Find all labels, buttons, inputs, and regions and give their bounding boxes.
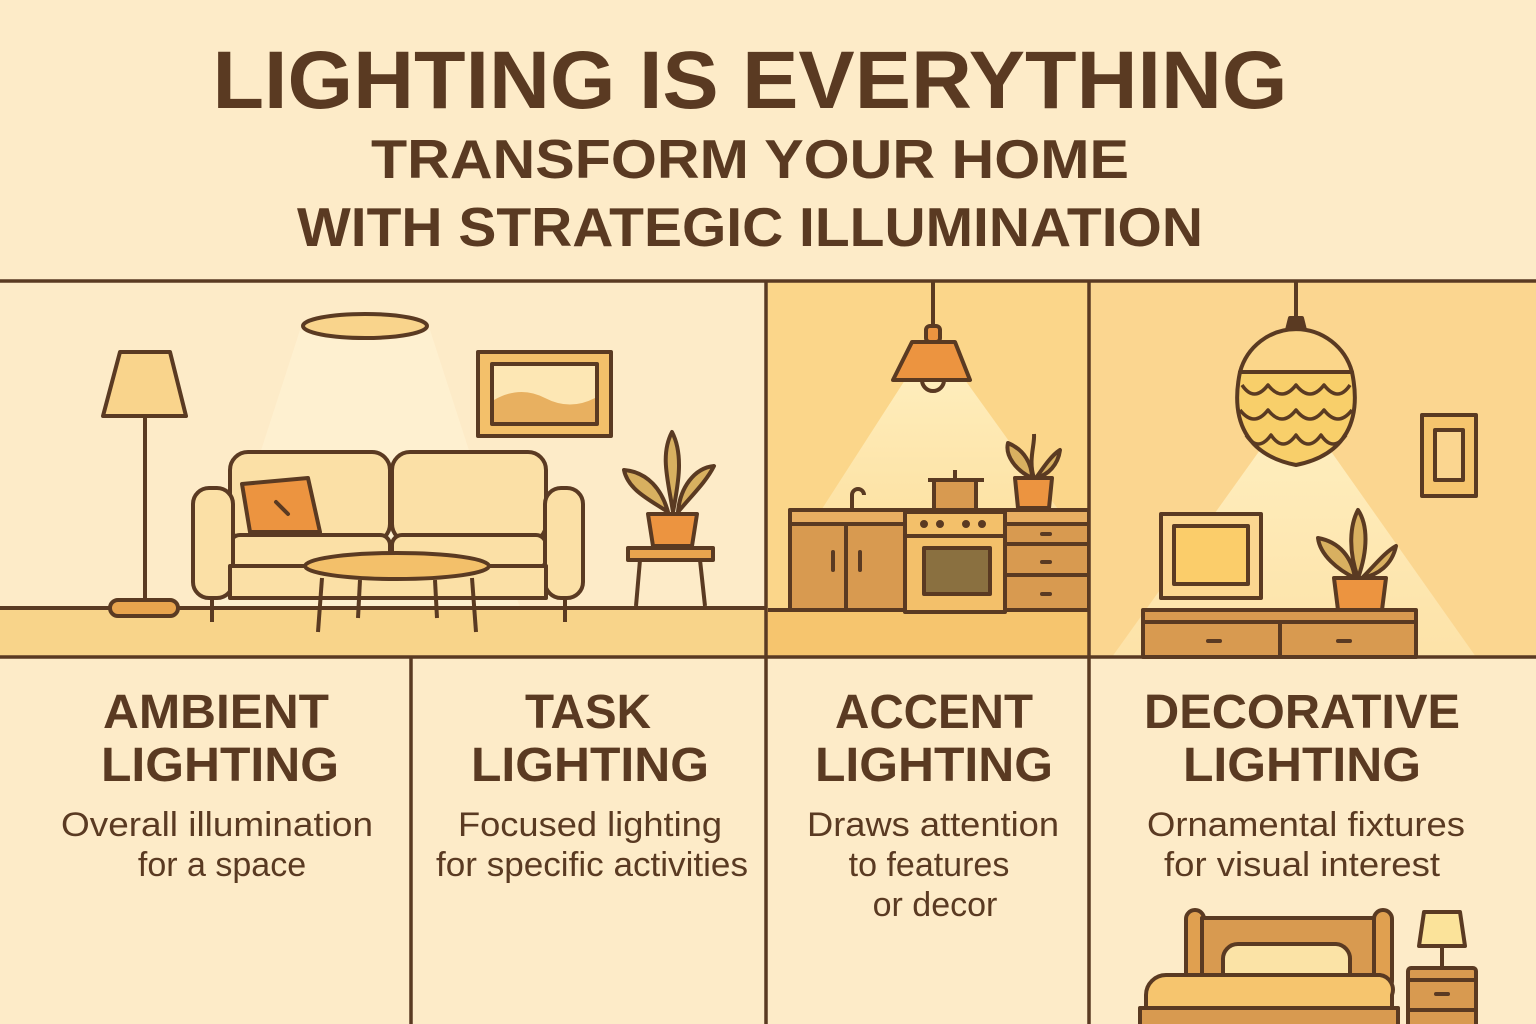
text block: ambient: AMBIENT (103, 686, 329, 739)
text block: ambient: for a space (138, 846, 306, 884)
icon: wall frame (1422, 415, 1476, 496)
text block: ambient: LIGHTING (101, 739, 339, 792)
text block: accent: to features (849, 846, 1009, 884)
icon: picture frame (478, 352, 611, 436)
text block: task: TASK (525, 686, 651, 739)
text block: decorative (1144, 686, 1465, 884)
text block: decorative: Ornamental fixtures (1147, 806, 1465, 844)
subtitle (297, 128, 1203, 258)
icon: ornamental pendant (1237, 281, 1355, 465)
text block: ambient: Overall illumination (61, 806, 373, 844)
text block: decorative: DECORATIVE (1144, 686, 1460, 739)
icon: decorative plant (1318, 510, 1396, 610)
icon: bed with nightstand (1140, 910, 1476, 1024)
text block: task: for specific activities (436, 846, 748, 884)
title (212, 35, 1288, 258)
text block: accent: or decor (873, 886, 997, 924)
title: LIGHTING IS EVERYTHING (212, 35, 1288, 126)
panel: ambient scene (0, 281, 766, 657)
subtitle: TRANSFORM YOUR HOME (371, 128, 1129, 190)
icon: floor lamp (103, 352, 186, 616)
panel: grid lines (0, 281, 1536, 1024)
text block: decorative: LIGHTING (1183, 739, 1421, 792)
icon: ceiling light (303, 314, 427, 338)
icon: picture frame (1161, 514, 1261, 598)
subtitle: WITH STRATEGIC ILLUMINATION (297, 196, 1203, 258)
text block: ambient (61, 686, 373, 884)
text block: accent: Draws attention (807, 806, 1059, 844)
text block: task: LIGHTING (471, 739, 709, 792)
icon: kitchen counter (768, 489, 1089, 612)
icon: plant on stool (624, 432, 714, 606)
text block: task: Focused lighting (458, 806, 722, 844)
icon: pot (928, 470, 984, 510)
icon: coffee table (305, 553, 489, 632)
text block: accent: ACCENT (835, 686, 1033, 739)
icon: kitchen plant (1007, 434, 1060, 508)
panel: decorative scene (1089, 281, 1536, 657)
icon: pendant lamp (893, 281, 970, 391)
text block: accent (807, 686, 1059, 924)
text block: task (436, 686, 748, 884)
text block: accent: LIGHTING (815, 739, 1053, 792)
icon: dresser (1143, 610, 1416, 657)
icon: sofa (193, 452, 583, 622)
panel: task scene (766, 281, 1089, 657)
text block: decorative: for visual interest (1164, 846, 1441, 884)
